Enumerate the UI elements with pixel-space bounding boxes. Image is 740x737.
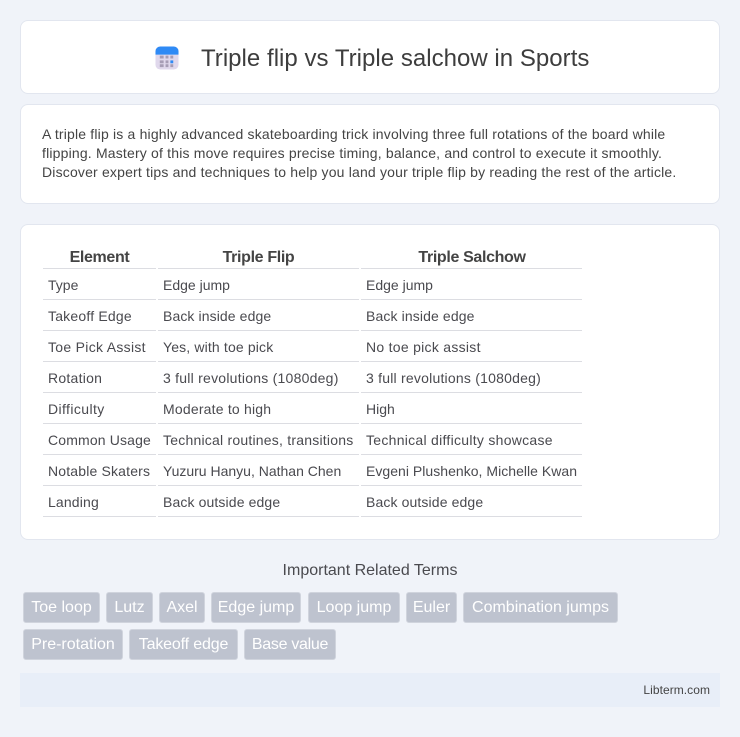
tag: Lutz bbox=[114, 599, 145, 616]
row: Type bbox=[48, 277, 433, 293]
tag bbox=[406, 592, 457, 623]
row: Takeoff Edge: Takeoff Edge bbox=[48, 308, 132, 324]
row: Common Usage: Technical routines, transitions bbox=[163, 432, 353, 448]
table header: Triple Salchow bbox=[418, 249, 526, 266]
row: Type: Edge jump bbox=[163, 277, 230, 293]
row: Notable Skaters: Yuzuru Hanyu, Nathan Chen bbox=[163, 463, 341, 479]
tag bbox=[211, 592, 301, 623]
tag bbox=[244, 629, 336, 660]
title: Triple flip vs Triple salchow in Sports bbox=[201, 45, 589, 72]
tag: Loop jump bbox=[317, 599, 391, 616]
row: Rotation: 3 full revolutions (1080deg) bbox=[163, 370, 339, 386]
intro paragraph bbox=[42, 126, 676, 180]
intro paragraph: flipping. Mastery of this move requires precise timing, balance, and control to execute it smoothly. bbox=[42, 145, 662, 161]
footer bar bbox=[20, 673, 720, 707]
tag bbox=[129, 629, 238, 660]
row: Toe Pick Assist: Yes, with toe pick bbox=[163, 339, 273, 355]
footer credit: Libterm.com bbox=[643, 683, 710, 697]
tag bbox=[23, 629, 123, 660]
row: Rotation bbox=[48, 370, 541, 386]
tag: Edge jump bbox=[218, 599, 294, 616]
tag: Combination jumps bbox=[472, 599, 609, 616]
row: Notable Skaters bbox=[48, 463, 577, 479]
tag: Toe loop bbox=[31, 599, 92, 616]
row: Common Usage: Technical difficulty showcase bbox=[366, 432, 553, 448]
row: Landing: Back outside edge bbox=[163, 494, 280, 510]
tag: Axel bbox=[166, 599, 198, 616]
row: Common Usage: Common Usage bbox=[48, 432, 151, 448]
heading: related terms: Important Related Terms bbox=[283, 562, 457, 579]
tag bbox=[308, 592, 400, 623]
row: Difficulty: Moderate to high bbox=[163, 401, 271, 417]
panel: related term tags bbox=[23, 592, 618, 660]
icon: calendar bbox=[155, 46, 179, 70]
row: Landing: Landing bbox=[48, 494, 99, 510]
row: Toe Pick Assist: No toe pick assist bbox=[366, 339, 481, 355]
tag bbox=[159, 592, 205, 623]
row: Rotation: 3 full revolutions (1080deg) bbox=[366, 370, 541, 386]
tag bbox=[23, 592, 100, 623]
row: Takeoff Edge: Back inside edge bbox=[366, 308, 475, 324]
row: Landing bbox=[48, 494, 483, 510]
row: Landing: Back outside edge bbox=[366, 494, 483, 510]
tag: Pre-rotation bbox=[31, 636, 115, 653]
row: Toe Pick Assist: Toe Pick Assist bbox=[48, 339, 146, 355]
table header bbox=[70, 249, 526, 266]
row: Type: Type bbox=[48, 277, 78, 293]
row: Takeoff Edge bbox=[48, 308, 475, 324]
row: Takeoff Edge: Back inside edge bbox=[163, 308, 271, 324]
table header: Triple Flip bbox=[223, 249, 294, 266]
intro paragraph: A triple flip is a highly advanced skateboarding trick involving three full rotations of the board while bbox=[42, 126, 665, 142]
row: Difficulty: High bbox=[366, 401, 395, 417]
panel: title card bbox=[20, 20, 720, 94]
panel: comparison table bbox=[20, 224, 720, 540]
tag: Euler bbox=[413, 599, 450, 616]
row: Difficulty bbox=[48, 401, 395, 417]
intro paragraph: Discover expert tips and techniques to help you land your triple flip by reading the rest of the article. bbox=[42, 164, 676, 180]
row: Type: Edge jump bbox=[366, 277, 433, 293]
row: Difficulty: Difficulty bbox=[48, 401, 105, 417]
tag bbox=[463, 592, 618, 623]
row: Notable Skaters: Notable Skaters bbox=[48, 463, 150, 479]
tag: Takeoff edge bbox=[139, 636, 228, 653]
row: Toe Pick Assist bbox=[48, 339, 481, 355]
tag bbox=[106, 592, 153, 623]
row: Common Usage bbox=[48, 432, 553, 448]
panel: intro text bbox=[20, 104, 720, 204]
table header: Element bbox=[70, 249, 129, 266]
row: Notable Skaters: Evgeni Plushenko, Michelle Kwan bbox=[366, 463, 577, 479]
row: Rotation: Rotation bbox=[48, 370, 102, 386]
tag: Base value bbox=[252, 636, 328, 653]
